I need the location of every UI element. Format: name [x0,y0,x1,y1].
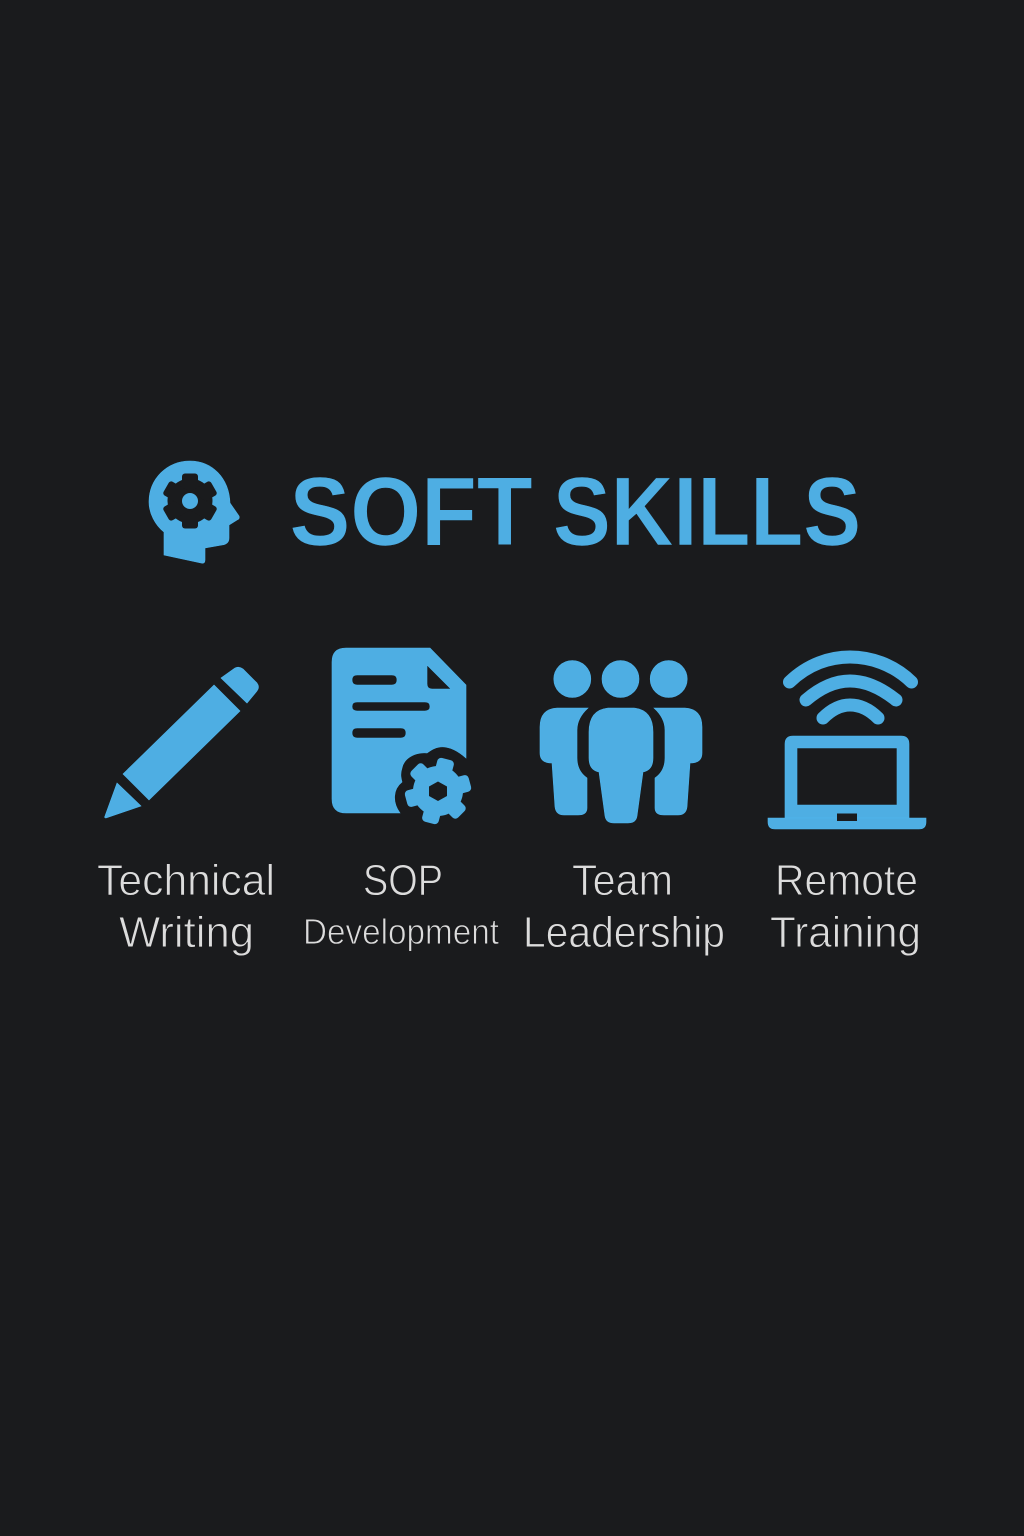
label: remote training: Training [770,908,921,957]
label: SOP development [303,856,499,952]
skill: team leadership [523,660,725,957]
icon: three people [540,660,702,823]
label: technical writing [97,856,275,957]
header: soft skills [149,457,861,566]
icon: pencil [105,667,259,818]
title: SOFT [290,457,532,566]
label: technical writing: Writing [119,908,254,957]
title [290,457,861,566]
label: SOP development: Development [303,911,499,952]
label: team leadership: Team [572,856,673,905]
skill: technical writing [97,667,275,957]
skill: remote training [768,657,926,957]
label: remote training: Remote [775,856,918,905]
icon: document with gear [332,648,478,831]
title: SKILLS [553,457,861,566]
label: remote training [770,856,921,957]
label: team leadership: Leadership [523,908,725,957]
label: team leadership [523,856,725,957]
label: technical writing: Technical [97,856,275,905]
label: SOP development: SOP [363,856,443,905]
icon: head with gear [149,461,239,563]
skill: SOP development [303,648,499,952]
icon: laptop with wifi [768,657,926,829]
